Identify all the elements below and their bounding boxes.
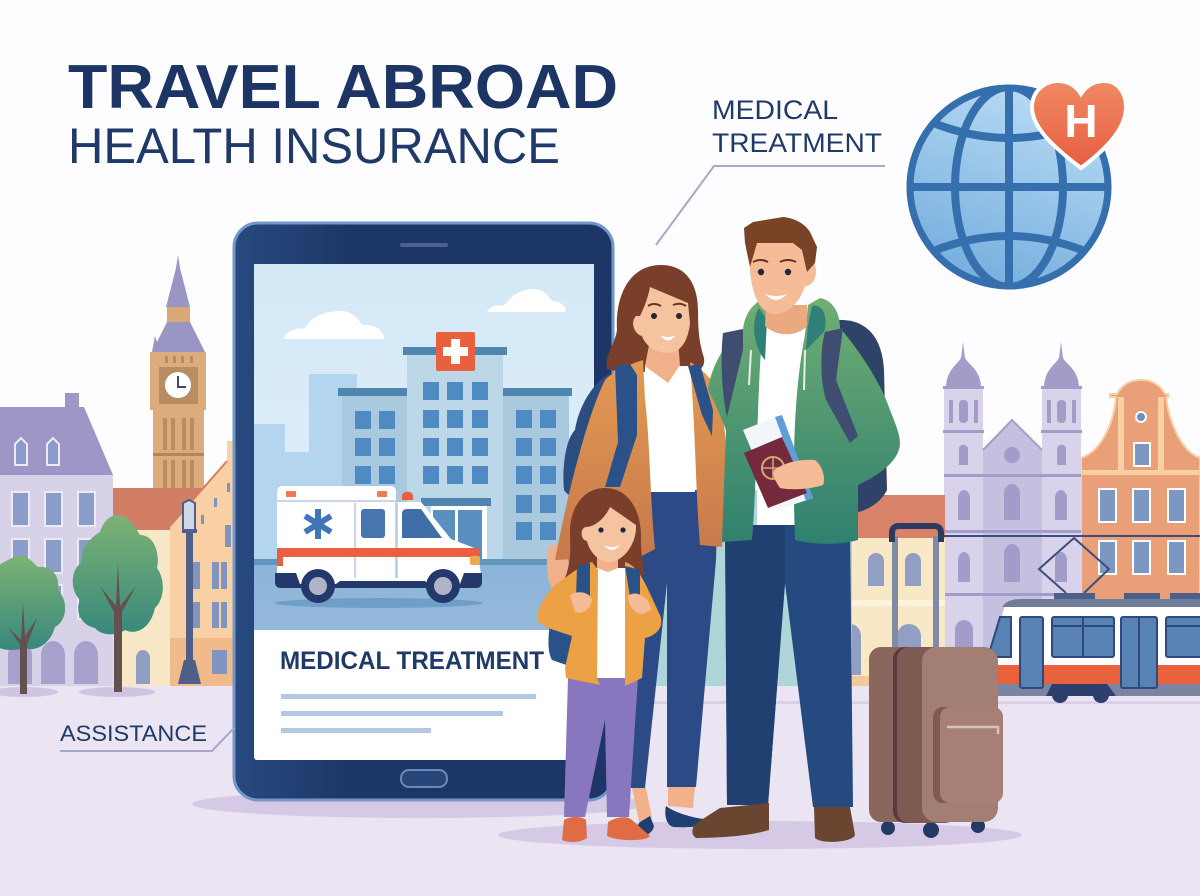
icon: heart H <box>1032 81 1126 168</box>
tablet <box>192 223 648 818</box>
legs <box>625 490 718 788</box>
street lamp <box>178 500 201 684</box>
clock tower <box>150 255 206 490</box>
title <box>68 53 618 174</box>
child <box>537 488 661 842</box>
icon: heart H: H <box>1064 95 1098 147</box>
screen text lines <box>281 694 536 733</box>
jacket <box>555 360 655 560</box>
woman <box>547 265 726 837</box>
title: TRAVEL ABROAD <box>68 53 618 122</box>
tree right <box>73 515 163 697</box>
cream house behind suitcase <box>850 495 945 686</box>
neck <box>597 555 618 572</box>
neck <box>765 305 807 334</box>
tram <box>944 536 1200 703</box>
callout: medical treatment: MEDICAL <box>712 95 838 125</box>
screen heading: MEDICAL TREATMENT <box>280 647 544 675</box>
hands <box>570 592 652 614</box>
left cityscape <box>0 255 233 697</box>
callout: medical treatment: TREATMENT <box>712 128 882 158</box>
teal backdrop behind legs <box>612 490 852 686</box>
neck <box>645 340 680 383</box>
callout: assistance <box>60 721 234 751</box>
tree left <box>0 556 65 697</box>
shirt <box>642 366 695 492</box>
right cityscape <box>850 342 1200 703</box>
left shoe <box>692 803 769 838</box>
backpack <box>835 320 887 513</box>
hospital scene <box>254 264 594 630</box>
straps <box>722 329 743 417</box>
shirt <box>757 323 807 525</box>
shoes <box>562 817 650 842</box>
callout: assistance: ASSISTANCE <box>60 721 207 746</box>
legs <box>725 525 853 807</box>
orange gabled house <box>1081 380 1200 690</box>
purple house <box>0 393 113 686</box>
hair <box>744 217 817 272</box>
jacket <box>708 298 768 542</box>
face <box>750 235 816 314</box>
straps <box>605 364 637 487</box>
icon: globe with heart <box>909 81 1126 287</box>
man <box>692 217 900 842</box>
backpack <box>563 373 610 503</box>
straps <box>576 563 640 598</box>
face <box>633 287 690 353</box>
red roof and houses <box>113 441 233 686</box>
ticket and passport <box>743 415 824 510</box>
backpack <box>548 600 580 668</box>
suitcase <box>869 526 1003 838</box>
face <box>582 507 636 562</box>
shirt <box>596 568 626 678</box>
hood lining <box>754 306 826 360</box>
ambulance <box>275 486 483 608</box>
hair <box>565 488 645 578</box>
arm skin <box>547 540 570 592</box>
jacket <box>537 562 600 685</box>
hair back <box>606 265 704 372</box>
legs <box>564 678 638 817</box>
church <box>943 342 1082 686</box>
right shoe <box>814 807 855 842</box>
family shadow <box>498 821 1022 849</box>
title: HEALTH INSURANCE <box>68 118 560 174</box>
callout: medical treatment <box>656 95 885 245</box>
icon: hospital cross <box>436 332 475 371</box>
